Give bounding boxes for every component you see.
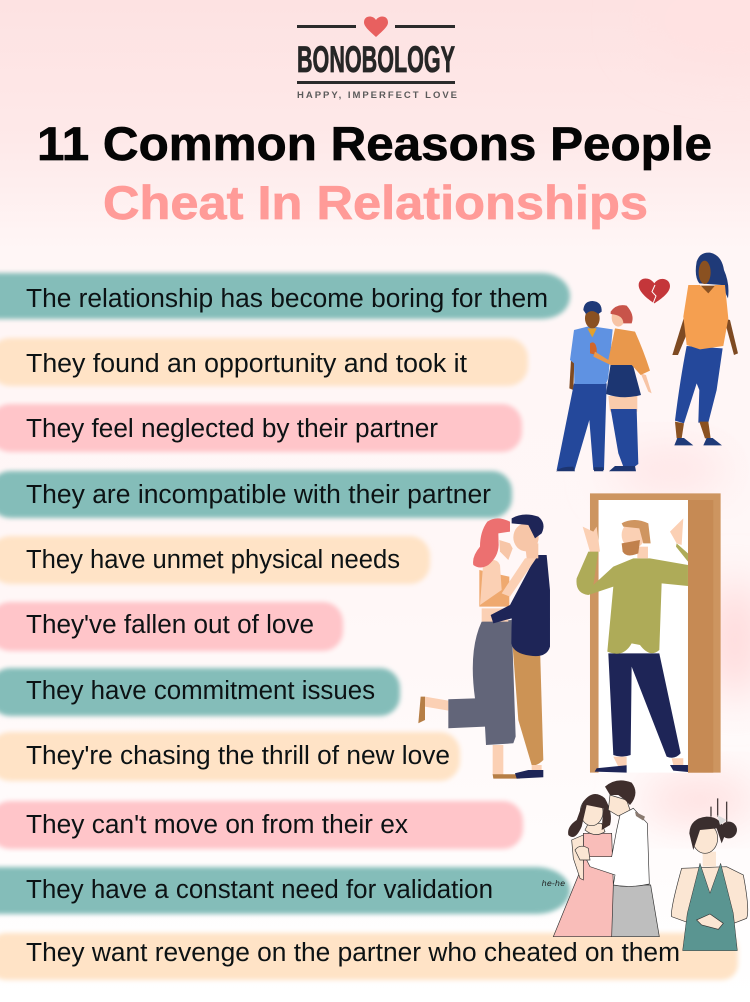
reason bar 3: They feel neglected by their partner bbox=[26, 415, 439, 443]
reason bar 6 bbox=[0, 602, 343, 651]
reason bar 7 bbox=[0, 668, 400, 716]
title: 11 Common Reasons People bbox=[37, 117, 712, 170]
reason bar 10: They have a constant need for validation bbox=[26, 876, 493, 904]
reason bar 7: They have commitment issues bbox=[26, 677, 375, 705]
reason bar 11: They want revenge on the partner who cheated on them bbox=[26, 939, 680, 967]
icon: heart bbox=[364, 17, 388, 37]
man in white shirt bbox=[575, 780, 659, 937]
reason bar 5 bbox=[0, 536, 430, 584]
reason bar 8: They're chasing the thrill of new love bbox=[26, 742, 450, 770]
reason bar 9: They can't move on from their ex bbox=[26, 811, 408, 839]
reason bar 8 bbox=[0, 732, 460, 781]
woman in pink dress bbox=[553, 794, 615, 937]
logo: Bonobology bbox=[297, 17, 457, 101]
reason bar 11 bbox=[0, 933, 738, 980]
reason bar 3 bbox=[0, 404, 522, 452]
title: Cheat In Relationships bbox=[103, 176, 648, 229]
reason bar 2 bbox=[0, 338, 528, 386]
reason bar 9 bbox=[0, 801, 523, 849]
illustration: kissing couple bbox=[418, 515, 550, 779]
logo: Bonobology: BONOBOLOGY bbox=[297, 39, 455, 80]
reason bar 5: They have unmet physical needs bbox=[26, 546, 400, 574]
reason bar 1 bbox=[0, 273, 570, 319]
reason bar 4 bbox=[0, 471, 512, 518]
icon: broken heart bbox=[639, 278, 670, 303]
list of reasons bbox=[0, 273, 738, 980]
reason bar 2: They found an opportunity and took it bbox=[26, 350, 467, 378]
sad woman in teal dress bbox=[671, 798, 748, 951]
illustration: couple and betrayed woman bbox=[556, 253, 738, 471]
text: he-he: he-he bbox=[542, 879, 565, 888]
title bbox=[37, 117, 712, 229]
reason bar 6: They've fallen out of love bbox=[26, 611, 314, 639]
logo: Bonobology: HAPPY, IMPERFECT LOVE bbox=[297, 90, 457, 101]
illustration: door frame and man bbox=[576, 493, 721, 773]
reason bar 1: The relationship has become boring for them bbox=[26, 285, 548, 313]
reason bar 10 bbox=[0, 867, 570, 914]
illustration: dancing couple and sad woman bbox=[542, 780, 748, 951]
reason bar 4: They are incompatible with their partner bbox=[26, 481, 492, 509]
